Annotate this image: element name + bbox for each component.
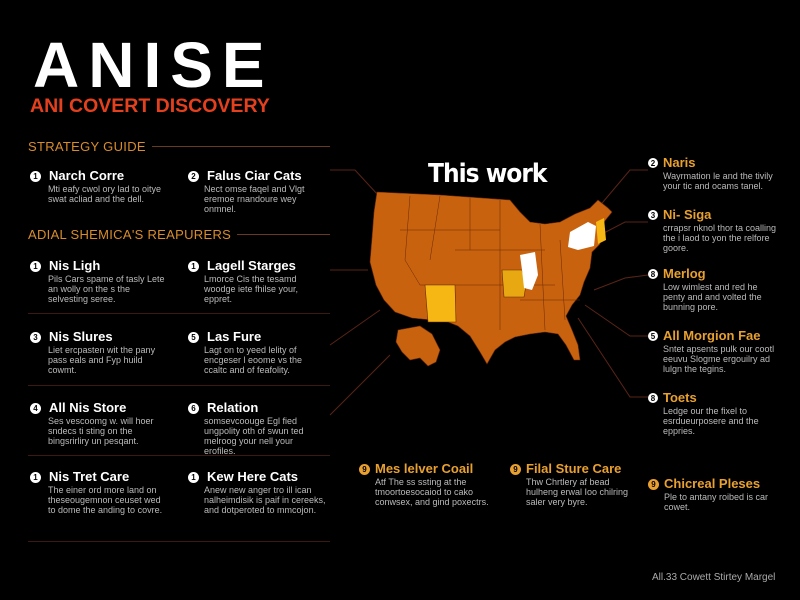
item: All Nis Store: 4 — [33, 404, 38, 413]
bottom item: Chicreal Pleses: Chicreal Pleses — [664, 476, 760, 491]
item: Falus Ciar Cats: 2 — [191, 172, 196, 181]
right item: Merlog: Low wimlest and red he penty and and volted the bunning pore. — [663, 282, 762, 312]
item: Las Fure: Lagt on to yeed lelity of encgeser l eoome vs the ccaltc and of feafolity. — [204, 345, 302, 375]
item: Falus Ciar Cats — [188, 168, 305, 214]
bottom item: Chicreal Pleses: Ple to antany roibed is car cowet. — [664, 492, 768, 512]
item: Nis Tret Care: The einer ord more land on theseougemnon ceuset wed to dome the anding to covre. — [48, 485, 162, 515]
right item: Toets: Toets — [663, 390, 697, 405]
bottom item: Mes lelver Coail: Atf The ss ssting at the tmoortoesocaiod to cako conwsex, and gind poxectrs. — [375, 477, 489, 507]
right item: All Morgion Fae: All Morgion Fae — [663, 328, 760, 343]
item: Relation: Relation — [207, 400, 258, 415]
right item: Naris: Naris — [663, 155, 696, 170]
item: All Nis Store — [30, 400, 154, 446]
item: Relation: somsevcoouge Egl fied ungpolity oth of swun ted melroog your nell your erofiles. — [204, 416, 304, 456]
item: Lagell Starges: 1 — [191, 262, 196, 271]
right item: Naris — [648, 155, 773, 191]
item: Lagell Starges — [188, 258, 298, 304]
right item: All Morgion Fae: 5 — [651, 332, 655, 341]
bottom item: Filal Sture Care: Filal Sture Care — [526, 461, 621, 476]
item: Nis Ligh: Nis Ligh — [49, 258, 100, 273]
item: All Nis Store: All Nis Store — [49, 400, 126, 415]
item: Falus Ciar Cats: Falus Ciar Cats — [207, 168, 302, 183]
heading: strategy guide: STRATEGY GUIDE — [28, 139, 146, 154]
item: Narch Corre — [30, 168, 161, 204]
item: Lagell Starges: Lagell Starges — [207, 258, 296, 273]
title: ANISE — [33, 29, 274, 101]
right item: Merlog — [648, 266, 762, 312]
item: Narch Corre: Narch Corre — [49, 168, 124, 183]
bottom item: Chicreal Pleses — [648, 476, 768, 512]
item: Kew Here Cats — [188, 469, 326, 515]
item: Relation: 6 — [191, 404, 196, 413]
right item: Toets — [648, 390, 759, 436]
heading: reapurers: ADIAL SHEMICA'S REAPURERS — [28, 227, 231, 242]
item: Narch Corre: Mti eafy cwol ory lad to oitye swat acliad and the dell. — [48, 184, 161, 204]
item: Nis Slures — [30, 329, 156, 375]
item: Lagell Starges: Lmorce Cis the tesamd woodge iete fhilse your, eppret. — [204, 274, 298, 304]
item: Nis Slures: Nis Slures — [49, 329, 113, 344]
item: Nis Tret Care: 1 — [33, 473, 38, 482]
item: Las Fure: Las Fure — [207, 329, 261, 344]
right item: Naris: Wayrmation le and the tivily your tic and ocams tanel. — [663, 171, 773, 191]
item: Las Fure: 5 — [191, 333, 196, 342]
item: Falus Ciar Cats: Nect omse faqel and Vlgt eremoe rnandoure wey onmnel. — [204, 184, 305, 214]
item: Nis Ligh: 1 — [33, 262, 38, 271]
item: Nis Ligh: Pils Cars spame of tasly Lete an wolly on the s the selvesting seree. — [48, 274, 165, 304]
item: All Nis Store: Ses vescoomg w. will hoer sndecs ti sting on the bingsrirliry un pesqant. — [48, 416, 154, 446]
right item: Toets: 8 — [651, 394, 655, 403]
item: Nis Slures: 3 — [33, 333, 38, 342]
item: Nis Ligh — [30, 258, 165, 304]
bottom item: Chicreal Pleses: 9 — [651, 480, 656, 489]
right item: Ni-Siga: Ni- Siga — [663, 207, 711, 222]
item: Nis Tret Care: Nis Tret Care — [49, 469, 129, 484]
item: Kew Here Cats: 1 — [191, 473, 196, 482]
bottom item: Mes lelver Coail: Mes lelver Coail — [375, 461, 473, 476]
item: Las Fure — [188, 329, 302, 375]
bottom item: Mes lelver Coail: 9 — [362, 465, 367, 474]
bottom item: Filal Sture Care: Thw Chrtlery af bead hulheng erwal Ioo chilring saler very byre. — [526, 477, 628, 507]
item: Kew Here Cats: Kew Here Cats — [207, 469, 298, 484]
right item: All Morgion Fae — [648, 328, 774, 374]
item: Narch Corre: 1 — [33, 172, 38, 181]
subtitle: ANI COVERT DISCOVERY — [30, 95, 270, 117]
right item: Merlog: Merlog — [663, 266, 706, 281]
right item: Ni-Siga: 3 — [651, 211, 655, 220]
bottom item: Filal Sture Care: 9 — [513, 465, 518, 474]
footer: All.33 Cowett Stirtey Margel — [652, 572, 775, 583]
bottom item: Filal Sture Care — [510, 461, 628, 507]
right item: Toets: Ledge our the fixel to esrdueurposere and the eppries. — [663, 406, 759, 436]
item: Nis Slures: Liet ercpasten wit the pany pass eals and Fyp huild cowmt. — [48, 345, 155, 375]
map title: This work — [428, 159, 546, 189]
right item: Ni-Siga: crrapsr nknol thor ta coalling the i laod to yon the relfore goore. — [663, 223, 776, 253]
right item: All Morgion Fae: Sntet apsents pulk our cootl eeuvu Slogme ergouilry ad lulgn the tegins. — [663, 344, 774, 374]
item: Kew Here Cats: Anew new anger tro ill ican nalheimdisik is paif in cereeks, and dotperoted to mmcojon. — [204, 485, 326, 515]
right item: Merlog: 8 — [651, 270, 655, 279]
right item: Ni-Siga — [648, 207, 776, 253]
item: Relation — [188, 400, 304, 456]
right item: Naris: 2 — [651, 159, 655, 168]
bottom item: Mes lelver Coail — [359, 461, 489, 507]
item: Nis Tret Care — [30, 469, 162, 515]
